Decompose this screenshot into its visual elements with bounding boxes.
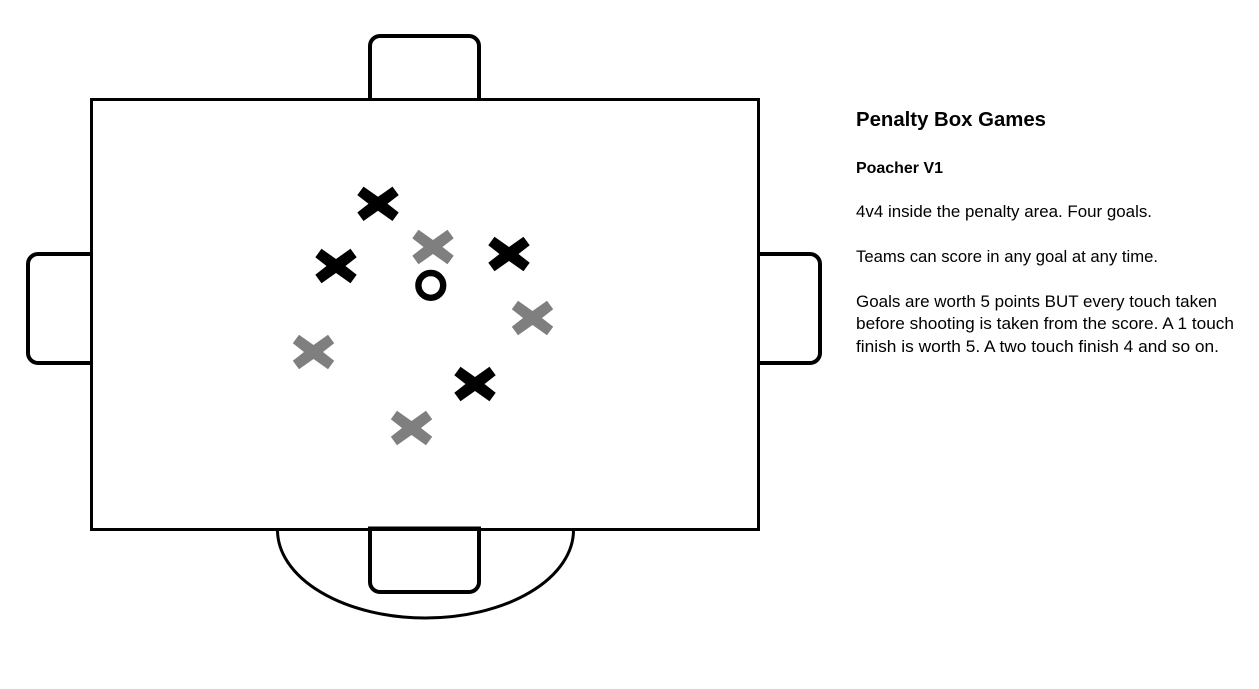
- black team players: [315, 187, 530, 401]
- title: Penalty Box Games: [856, 109, 1046, 131]
- text: scoring rule: Teams can score in any goal at any time.: [856, 248, 1158, 266]
- subtitle: Poacher V1: [856, 160, 943, 177]
- text: points explanation: [856, 293, 1234, 356]
- text: points explanation: Goals are worth 5 points BUT every touch taken: [856, 293, 1217, 311]
- panel: pitch diagram: [28, 36, 820, 618]
- text: points explanation: before shooting is taken from the score. A 1 touch: [856, 315, 1234, 333]
- grey team players: [293, 230, 553, 445]
- panel: game description text: [856, 109, 1234, 356]
- text: points explanation: finish is worth 5. A two touch finish 4 and so on.: [856, 338, 1219, 356]
- top goal: [370, 36, 479, 99]
- ball: [418, 273, 443, 298]
- penalty arc: [278, 530, 574, 618]
- right goal: [758, 254, 820, 363]
- left goal: [28, 254, 91, 363]
- bottom goal: [370, 528, 479, 592]
- penalty area box: [92, 100, 758, 530]
- text: setup: 4v4 inside the penalty area. Four goals.: [856, 203, 1152, 221]
